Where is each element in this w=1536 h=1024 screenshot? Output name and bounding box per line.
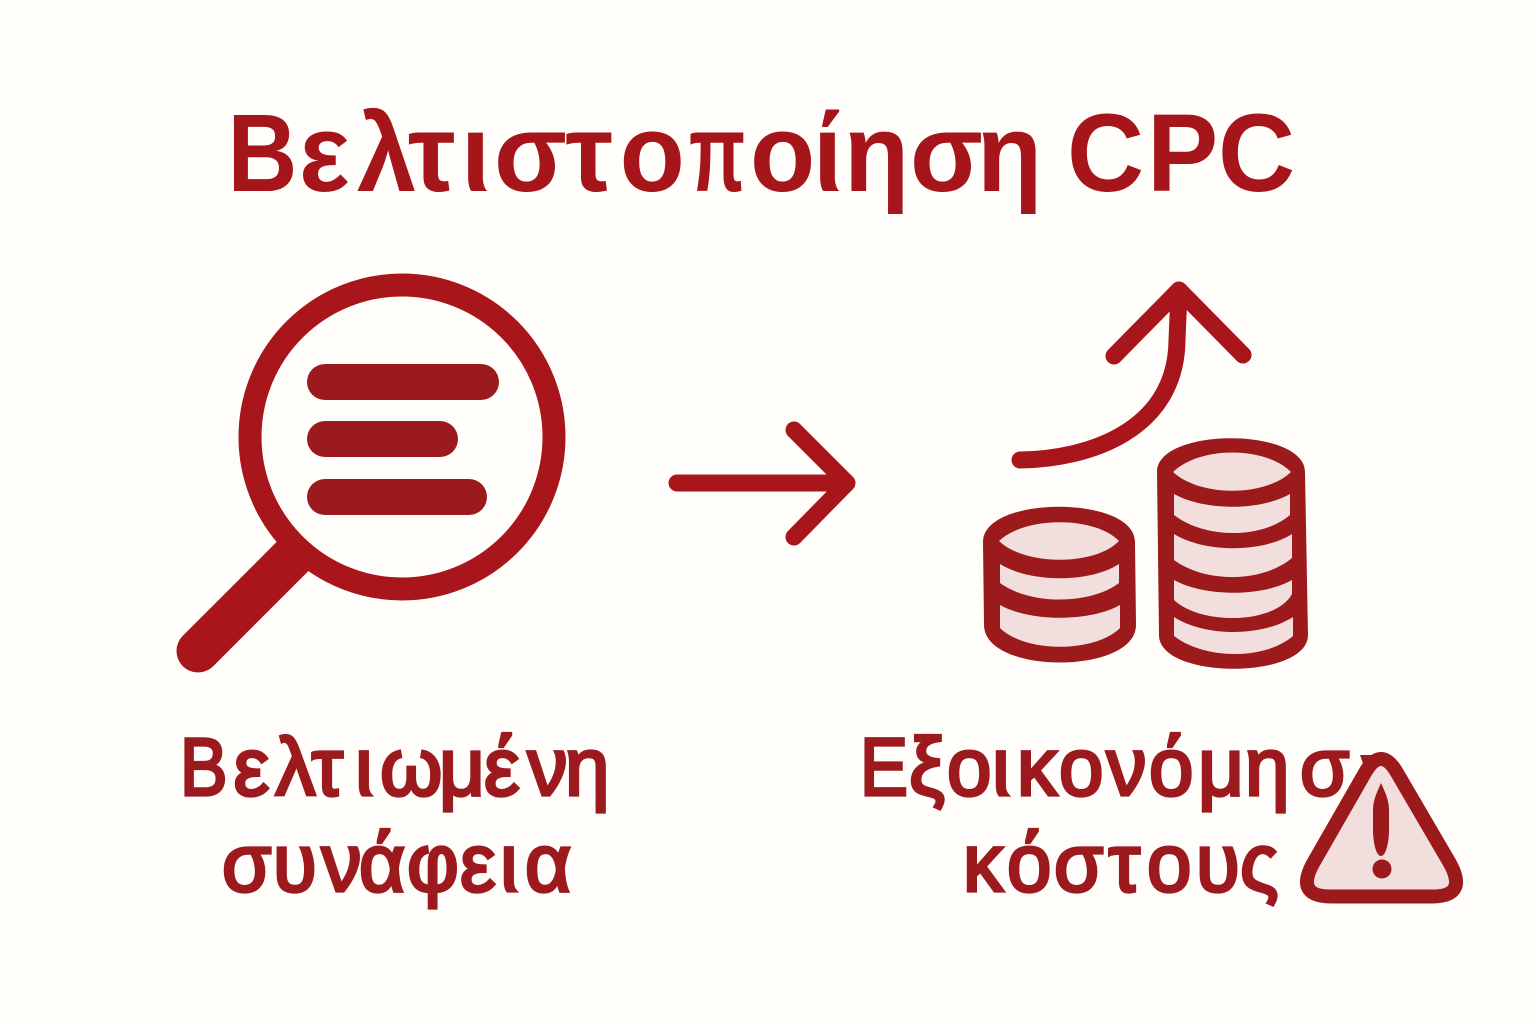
title: π [689, 92, 745, 214]
arrow: right [677, 430, 847, 537]
title: Β [228, 92, 297, 214]
icon: tall coin stack [1157, 438, 1308, 669]
label: cost savings: Ε [860, 722, 908, 813]
label: improved relevance: ελτιωμένη [234, 722, 609, 813]
label: improved relevance: συνάφεια [222, 818, 571, 909]
title: ελτιστο [299, 92, 685, 214]
label: cost savings: η [1367, 743, 1398, 808]
icon: magnifying glass [198, 285, 554, 651]
label: cost savings: κόστους [963, 818, 1278, 909]
icon: short coin stack [983, 507, 1136, 662]
label: improved relevance: Β [180, 722, 227, 813]
label: cost savings: ξοικονόμησ [909, 722, 1349, 813]
icon: rising arrow [1020, 290, 1243, 460]
icon: warning triangle [1307, 755, 1456, 896]
title: οίηση CPC [750, 92, 1295, 214]
